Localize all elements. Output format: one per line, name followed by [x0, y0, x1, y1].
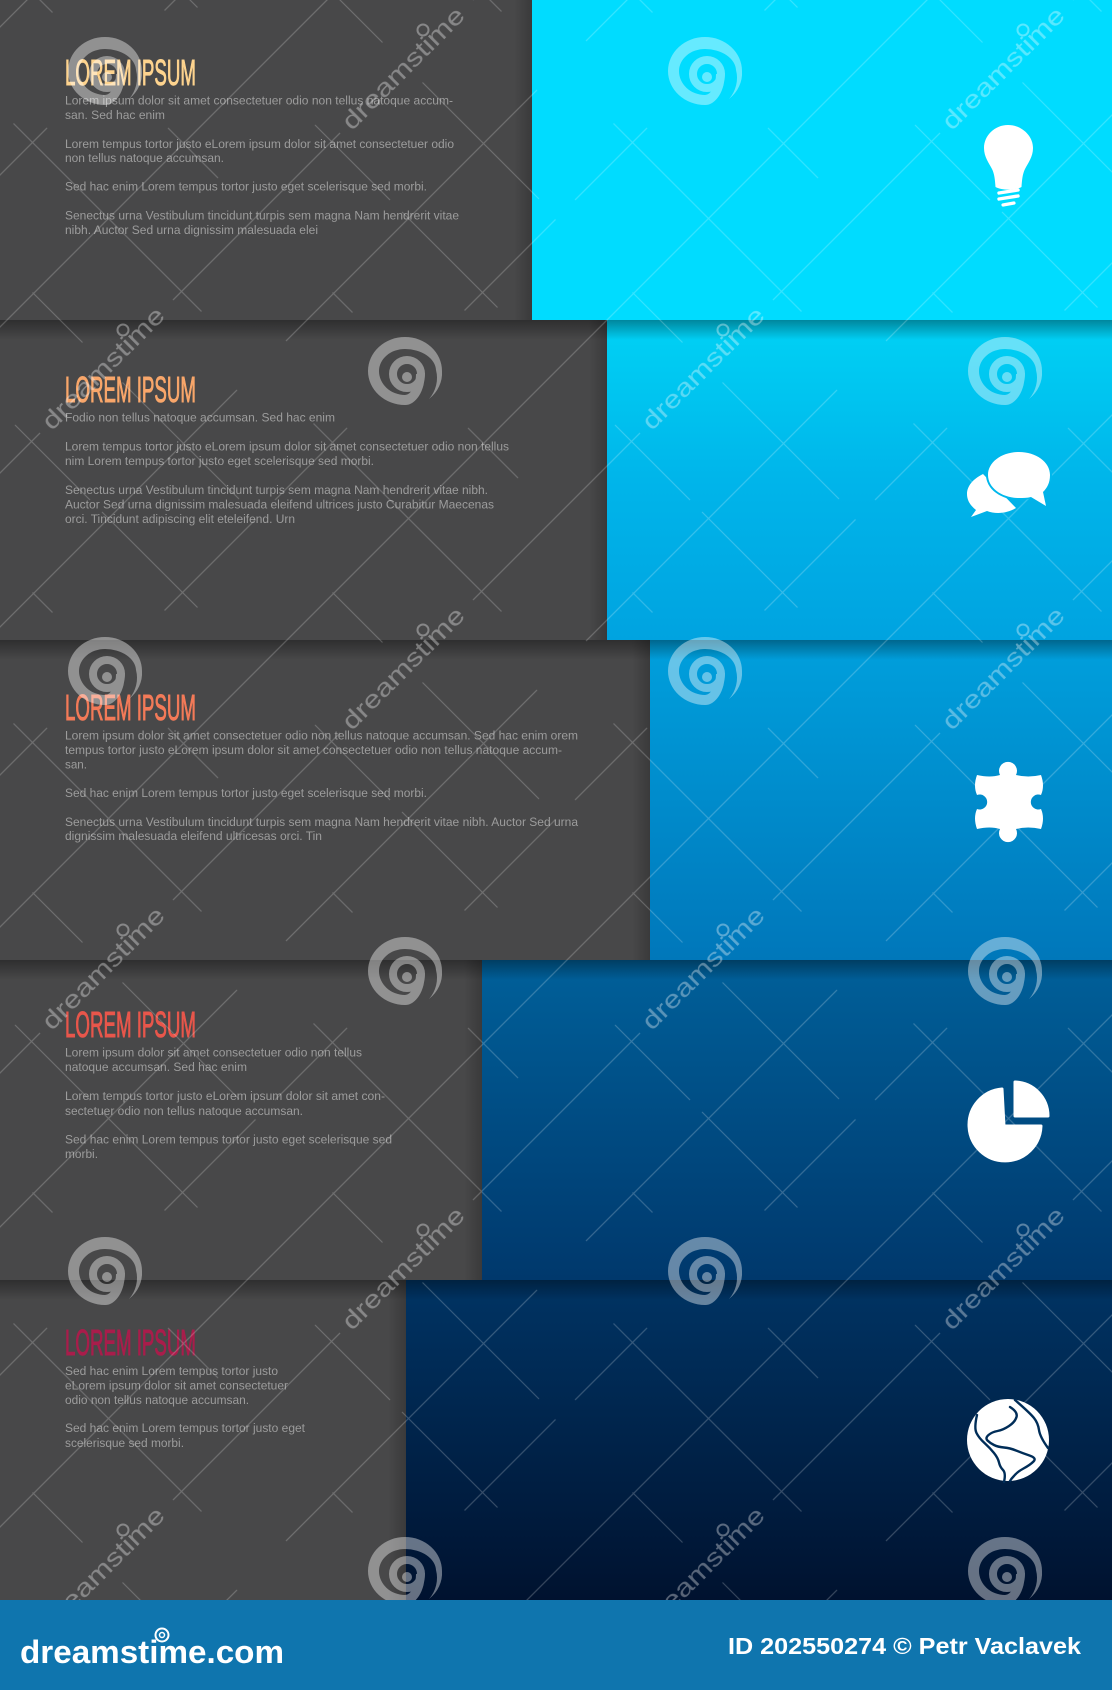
text block: row 2: nim Lorem tempus tortor justo eget scelerisque sed morbi.: [65, 454, 374, 468]
watermark: dreamstime labels: dreamstime: [636, 1501, 771, 1636]
panel: row 1: [0, 0, 1112, 320]
heading: row 2: LOREM IPSUM: [65, 369, 196, 410]
footer bar: [0, 1600, 1112, 1690]
icon: globe: [967, 1399, 1049, 1482]
heading: row 5: LOREM IPSUM: [65, 1322, 196, 1363]
panel: row 2: [0, 320, 1112, 640]
panel: row 3: [0, 640, 1112, 960]
text block: row 4: natoque accumsan. Sed hac enim: [65, 1060, 247, 1074]
panel: row 5: [0, 1280, 1112, 1600]
icon: light bulb: [984, 125, 1033, 205]
panel: row 4: [0, 960, 1112, 1280]
text block: row 3: san.: [65, 758, 87, 772]
text block: row 3: tempus tortor justo eLorem ipsum dolor sit amet consectetuer odio non tellus natoque accum-: [65, 743, 562, 757]
watermark: dreamstime labels: dreamstime: [636, 901, 771, 1036]
text block: row 5: Sed hac enim Lorem tempus tortor justo: [65, 1364, 278, 1378]
watermark: dreamstime labels: dreamstime: [36, 301, 171, 436]
text block: row 5: Sed hac enim Lorem tempus tortor justo eget: [65, 1421, 306, 1435]
text block: row 1: Lorem ipsum dolor sit amet consectetuer odio non tellus natoque accum-: [65, 94, 453, 108]
text block: row 4: morbi.: [65, 1147, 98, 1161]
watermark: dreamstime labels: dreamstime: [36, 1501, 171, 1636]
text block: row 1: Senectus urna Vestibulum tincidunt turpis sem magna Nam hendrerit vitae: [65, 208, 459, 222]
text block: row 3: [65, 728, 578, 843]
text block: row 5: odio non tellus natoque accumsan.: [65, 1393, 249, 1407]
text block: row 1: Lorem tempus tortor justo eLorem ipsum dolor sit amet consectetuer odio: [65, 137, 454, 151]
text block: row 2: orci. Tincidunt adipiscing elit eteleifend. Urn: [65, 512, 295, 526]
watermark: dreamstime labels: dreamstime: [36, 901, 171, 1036]
text block: row 3: Sed hac enim Lorem tempus tortor justo eget scelerisque sed morbi.: [65, 786, 427, 800]
footer logo: dreamstime.com: dreamstime.com: [20, 1634, 284, 1670]
text block: row 2: Auctor Sed urna dignissim malesuada eleifend ultrices justo Curabitur Maecenas: [65, 498, 494, 512]
heading: row 4: LOREM IPSUM: [65, 1004, 196, 1045]
footer credit: ID 202550274 © Petr Vaclavek: [728, 1633, 1081, 1659]
text block: row 2: Lorem tempus tortor justo eLorem ipsum dolor sit amet consectetuer odio non tellus: [65, 440, 509, 454]
text block: row 4: sectetuer odio non tellus natoque accumsan.: [65, 1104, 303, 1118]
text block: row 4: [65, 1046, 392, 1161]
text block: row 4: Lorem ipsum dolor sit amet consectetuer odio non tellus: [65, 1046, 362, 1060]
text block: row 2: [65, 410, 509, 526]
heading: row 3: LOREM IPSUM: [65, 687, 196, 728]
text block: row 1: san. Sed hac enim: [65, 108, 165, 122]
text block: row 4: Lorem tempus tortor justo eLorem ipsum dolor sit amet con-: [65, 1089, 385, 1103]
heading: row 1: LOREM IPSUM: [65, 52, 196, 93]
icon: pie chart: [969, 1082, 1048, 1161]
text block: row 2: Senectus urna Vestibulum tincidunt turpis sem magna Nam hendrerit vitae nibh.: [65, 483, 488, 497]
icon: speech bubbles: [967, 450, 1052, 517]
text block: row 1: Sed hac enim Lorem tempus tortor justo eget scelerisque sed morbi.: [65, 180, 427, 194]
text block: row 2: Fodio non tellus natoque accumsan. Sed hac enim: [65, 410, 335, 424]
text block: row 4: Sed hac enim Lorem tempus tortor justo eget scelerisque sed: [65, 1132, 392, 1146]
watermark: dreamstime labels: dreamstime: [936, 1201, 1071, 1336]
watermark: dreamstime labels: dreamstime: [936, 601, 1071, 736]
text block: row 5: eLorem ipsum dolor sit amet consectetuer: [65, 1378, 288, 1392]
watermark: dreamstime labels: dreamstime: [336, 1, 471, 136]
watermark: dreamstime labels: dreamstime: [336, 1201, 471, 1336]
watermark: dreamstime labels: dreamstime: [936, 1, 1071, 136]
text block: row 3: Senectus urna Vestibulum tincidunt turpis sem magna Nam hendrerit vitae nibh. Auctor Sed urna: [65, 815, 578, 829]
text block: row 1: non tellus natoque accumsan.: [65, 151, 224, 165]
text block: row 3: Lorem ipsum dolor sit amet consectetuer odio non tellus natoque accumsan. Sed hac enim orem: [65, 728, 578, 742]
icon: puzzle piece: [975, 762, 1043, 842]
text block: row 1: [65, 94, 459, 237]
text block: row 5: scelerisque sed morbi.: [65, 1436, 184, 1450]
text block: row 3: dignissim malesuada eleifend ultricesas orci. Tin: [65, 829, 322, 843]
watermark: dreamstime labels: dreamstime: [336, 601, 471, 736]
watermark: dreamstime labels: dreamstime: [636, 301, 771, 436]
text block: row 5: [65, 1364, 306, 1450]
text block: row 1: nibh. Auctor Sed urna dignissim malesuada elei: [65, 223, 318, 237]
